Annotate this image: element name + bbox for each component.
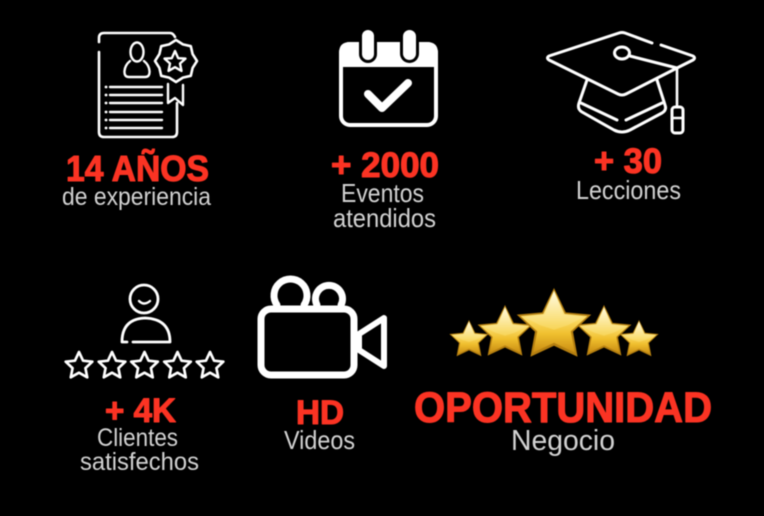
text: Negocio: Negocio [511,425,615,457]
heading: 14 AÑOS: 14 AÑOS [66,147,209,189]
text: Eventos: Eventos [341,178,424,208]
panel: 14 años de experiencia [62,33,211,211]
text: Clientes: Clientes [97,424,178,452]
text: Videos: Videos [284,425,355,455]
icon: calendar with check [339,27,438,125]
icon: smiling person with five stars [66,285,223,377]
icon: video camera [261,279,384,375]
icon: five gold stars [449,288,659,357]
heading: OPORTUNIDAD: OPORTUNIDAD [414,384,712,432]
panel: + 30 lecciones [548,32,694,205]
panel: HD videos [261,279,384,455]
text: satisfechos: satisfechos [80,448,199,476]
heading: + 4K: + 4K [105,392,176,430]
heading: + 30: + 30 [594,142,662,181]
text: de experiencia: de experiencia [62,183,211,211]
panel: oportunidad negocio [414,288,712,457]
text: atendidos: atendidos [333,203,436,233]
icon: certificate document with badge [99,33,197,137]
icon: graduation cap [548,32,694,133]
panel: + 2000 eventos atendidos [331,27,439,233]
panel: + 4K clientes satisfechos [66,285,223,476]
text: Lecciones: Lecciones [576,175,681,205]
heading: + 2000: + 2000 [331,146,439,185]
heading: HD: HD [296,394,344,432]
